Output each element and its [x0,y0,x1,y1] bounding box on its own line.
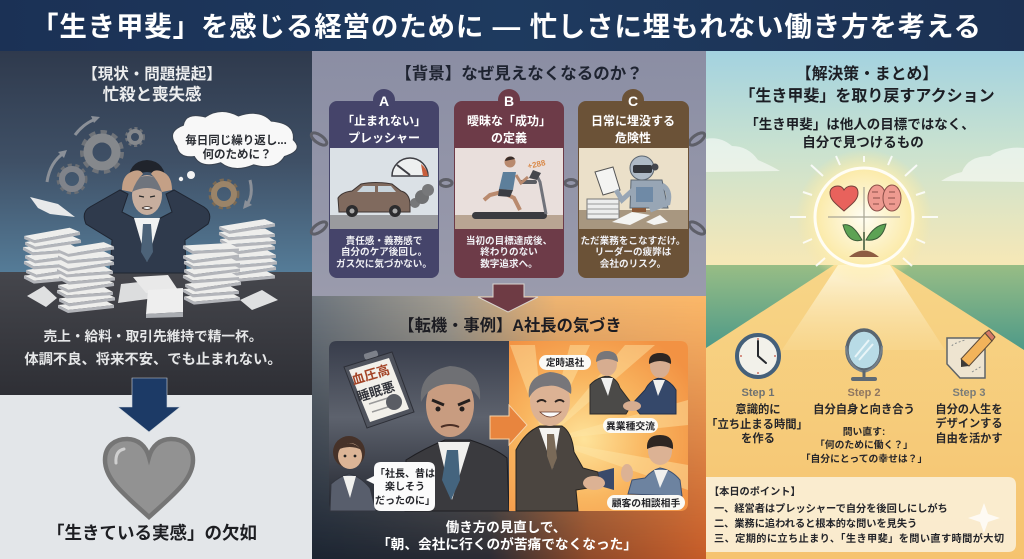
heading: solution: 【解決策・まとめ】 [796,64,938,83]
card C: 危険性 [615,130,651,145]
card A [329,89,439,278]
thought bubble: 何のために？ [202,147,272,161]
icon: man on treadmill: +288 [527,158,547,171]
green fields and path [706,265,1024,350]
card B: 曖昧な「成功」 [467,113,551,128]
card B: 終わりのない [480,246,538,258]
panel: turning point [312,296,706,559]
card B: B [504,93,514,109]
step 3: デザインする [935,416,1003,430]
president (smiling) [516,372,614,511]
heading: current situation [82,65,222,104]
step 2: 問い直す: [843,425,885,438]
step 1: を作る [741,431,775,445]
arrow: background to turning point [478,284,538,312]
icon: brain [868,185,901,211]
icon: glowing purpose circle [790,149,938,285]
icon: medical clipboard: 血圧高 [350,362,392,388]
icon: gears and arrows [47,116,252,209]
step 1 [706,335,808,445]
card C: C [628,93,638,109]
speech bubble [366,462,435,511]
card A: 「止まれない」 [342,113,426,128]
label: client advisor: 顧客の相談相手 [612,496,680,510]
icon: broken-down car [338,158,434,217]
title bar: 「生き甲斐」を感じる経営のために ― 忙しさに埋もれない働き方を考える [31,11,981,42]
scene: before [329,341,509,511]
card C: ただ業務をこなすだけ。 [580,235,686,247]
card C: 日常に埋没する [591,114,675,128]
step 2 [801,330,927,465]
icon: pencil and paper [947,330,995,378]
card A: プレッシャー [348,131,420,145]
step 2: 「自分にとっての幸せは？」 [801,452,927,465]
step 3: Step 3 [952,387,986,399]
heading: current situation: 【現状・問題提起】 [82,65,222,83]
icon: man on treadmill [472,156,547,219]
callout: key points: 【本日のポイント】 [709,485,801,498]
card A: 責任感・義務感で [346,235,422,247]
subheading: 自分で見つけるもの [802,134,924,150]
label: cross-industry exchange [603,418,658,433]
step 3 [935,330,1003,445]
heading: solution: 「生き甲斐」を取り戻すアクション [739,87,995,105]
text: lack of feeling alive: 「生きている実感」の欠如 [47,523,257,543]
card B: 数字追求へ。 [480,258,538,270]
illustration: paper stacks [23,197,278,318]
panel: solution [706,51,1024,559]
president (frowning) [405,366,509,511]
speech bubble: 「社長、昔は [375,467,435,480]
label: client advisor [607,495,685,510]
arrow: before to after [490,405,527,445]
subheading: 「生き甲斐」は他人の目標ではなく、 [745,116,975,132]
panel: background [309,51,707,297]
arrow: down [118,378,180,432]
label: on-time leave: 定時退社 [546,357,585,369]
employee woman [330,436,376,511]
heading: background: 【背景】なぜ見えなくなるのか？ [395,64,643,83]
thought bubble [172,112,297,181]
text: turning point result [377,519,637,552]
heading: current situation: 忙殺と喪失感 [102,84,202,104]
two men shaking hands [590,351,676,414]
heading: turning point: 【転機・事例】A社長の気づき [398,316,622,335]
speech bubble: 楽しそう [385,480,425,493]
text: turning point result: 「朝、会社に行くのが苦痛でなくなった」 [377,536,637,552]
subheading [745,116,975,150]
callout: key points: 一、経営者はプレッシャーで自分を後回しにしがち [714,502,948,515]
speech bubble: だったのに」 [375,495,435,507]
icon: sprout [843,224,886,257]
step 1: 「立ち止まる時間」 [706,417,808,431]
illustration: stressed man [84,160,210,273]
icon: medical clipboard: 睡眠悪 [355,379,397,405]
icon: heart [830,186,858,211]
card C: リーダーの疲弊は [595,246,672,258]
card C: 会社のリスク。 [600,258,666,270]
icon: robot at desk [587,156,669,225]
icon: mirror [846,330,882,381]
callout: key points: 二、業務に追われると根本的な問いを見失う [714,517,917,530]
client man [621,435,682,496]
scene: after [509,341,688,511]
callout: key points: 三、定期的に立ち止まり、「生き甲斐」を問い直す時間が大切 [714,532,1004,545]
clouds [706,138,1024,182]
text: problem description: 体調不良、将来不安、でも止まれない。 [24,350,282,368]
heading: solution [739,64,995,105]
card B [454,89,564,278]
step 2: Step 2 [847,387,881,399]
card A: ガス欠に気づかない。 [336,258,432,270]
card A: A [379,93,389,109]
card A: 自分のケア後回し。 [341,246,427,258]
icon: grey heart [105,439,193,517]
step 2: 「何のために働く？」 [815,438,913,451]
icon: medical clipboard [344,350,414,428]
label: cross-industry exchange: 異業種交流 [606,420,655,432]
label: on-time leave [539,355,591,370]
step 1: Step 1 [741,387,775,399]
panel: current situation [0,51,312,559]
card B: の定義 [491,130,527,145]
text: problem description [24,328,282,368]
step 3: 自由を活かす [935,431,1003,445]
chains [309,131,707,236]
callout: key points [706,477,1016,552]
step 2: 自分自身と向き合う [813,402,915,416]
text: turning point result: 働き方の見直しで、 [446,519,566,535]
step 3: 自分の人生を [935,402,1003,416]
card B: 当初の目標達成後、 [466,235,552,247]
title bar [0,0,1024,51]
text: problem description: 売上・給料・取引先維持で精一杯。 [43,328,263,344]
card C [578,89,689,278]
thought bubble: 毎日同じ繰り返し... [185,133,287,147]
icon: clock [737,335,779,377]
step 1: 意識的に [735,402,781,416]
